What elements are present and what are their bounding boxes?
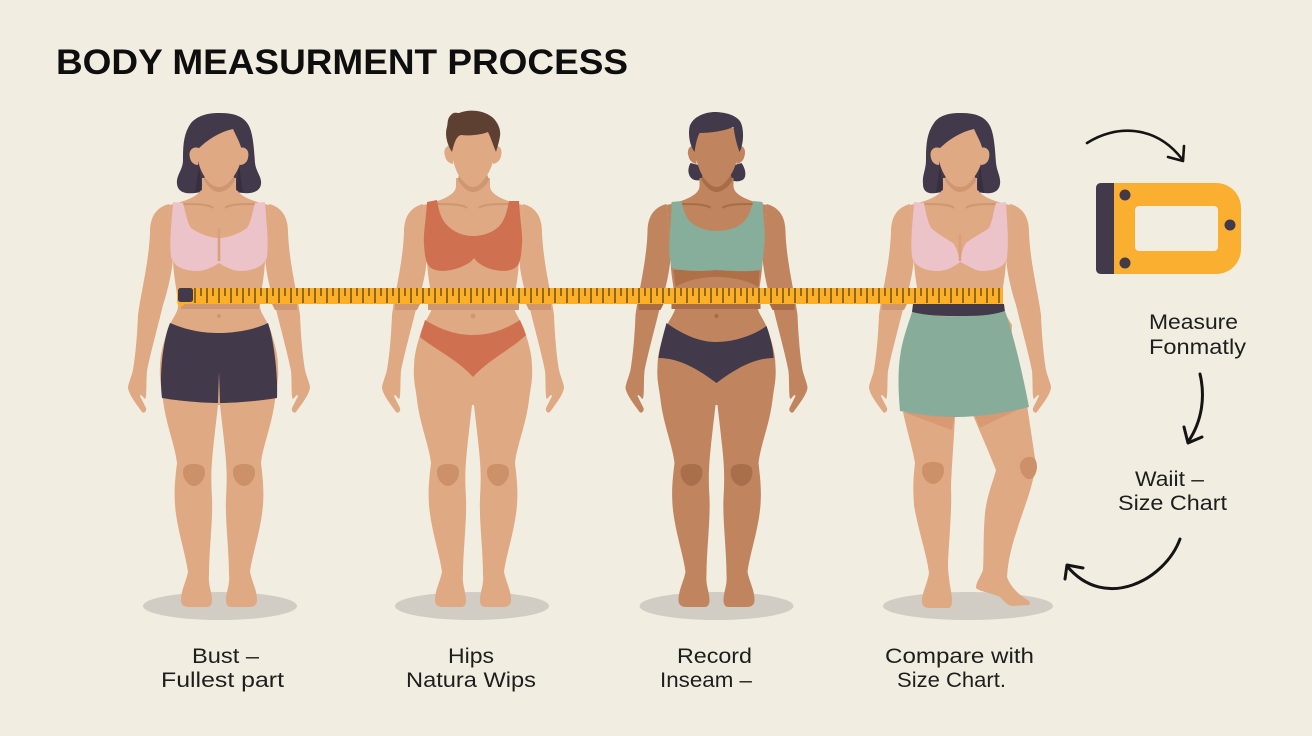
bra centre seam <box>959 234 961 261</box>
label: wait size chart: Size Chart <box>1118 492 1227 515</box>
caption: hips <box>406 645 536 692</box>
thigh shadows under skirt <box>903 405 1027 430</box>
label: wait size chart: Waiit – <box>1135 468 1204 491</box>
face <box>938 129 983 187</box>
tape shadow <box>395 304 551 310</box>
floor shadow <box>395 592 549 620</box>
right leg <box>973 405 1036 606</box>
body <box>626 178 808 607</box>
body <box>128 178 310 607</box>
crop top <box>669 201 765 271</box>
collarbones <box>680 204 752 208</box>
neck shadow <box>204 174 235 192</box>
hair back <box>177 113 261 193</box>
left leg <box>903 412 955 608</box>
tape body <box>177 288 1003 307</box>
figure 2: hips <box>382 111 564 620</box>
rivets <box>1120 190 1130 200</box>
knees <box>183 464 255 486</box>
torso and arms <box>869 178 1051 413</box>
tape end cap <box>178 288 193 302</box>
hair back <box>923 113 1000 193</box>
caption: compare: Size Chart. <box>897 669 1006 692</box>
tape shadow <box>882 304 907 310</box>
figure 4: compare with size chart <box>869 113 1053 620</box>
tied-back hair <box>689 112 743 152</box>
collarbones <box>437 204 509 208</box>
floor shadow <box>883 592 1053 620</box>
belly button <box>217 314 221 318</box>
caption: bust <box>161 645 284 692</box>
bra <box>170 202 268 271</box>
hair shading <box>936 165 984 193</box>
briefs <box>420 320 526 377</box>
bra centre seam <box>218 228 220 261</box>
bra <box>911 202 1008 271</box>
arrow: back <box>1065 539 1180 589</box>
knees <box>437 464 509 486</box>
collarbones <box>924 204 996 208</box>
ears <box>688 146 745 164</box>
shorts <box>161 323 277 403</box>
window <box>1135 206 1218 251</box>
belt <box>912 304 1005 316</box>
arrow: down <box>1184 374 1202 443</box>
arrow: to tool <box>1087 131 1184 161</box>
neck shadow <box>945 174 976 192</box>
hair buns <box>688 163 745 181</box>
face <box>450 130 496 187</box>
tape tool icon <box>1096 183 1241 274</box>
knees <box>680 464 752 486</box>
figure 3: inseam <box>626 112 808 620</box>
skirt <box>898 311 1029 417</box>
caption: inseam <box>660 645 752 692</box>
orange casing <box>1110 183 1241 274</box>
caption: inseam: Record <box>677 645 752 668</box>
caption: hips: Hips <box>448 645 494 668</box>
hair shading <box>195 165 243 193</box>
label: wait size chart <box>1118 468 1227 515</box>
belly button <box>714 314 719 318</box>
floor shadow <box>143 592 297 620</box>
neck shadow <box>702 174 732 192</box>
figure 1: bust <box>128 113 310 620</box>
briefs <box>658 323 774 383</box>
underbust shadow <box>674 270 760 287</box>
caption: hips: Natura Wips <box>406 669 536 692</box>
caption: bust: Bust – <box>192 645 259 668</box>
ears <box>444 146 502 164</box>
label: measure formally: Measure <box>1149 311 1238 334</box>
belly button <box>471 314 475 318</box>
face <box>197 129 242 187</box>
tape shadow <box>638 304 794 310</box>
short hair <box>446 111 500 152</box>
caption: bust: Fullest part <box>161 669 284 692</box>
caption: compare: Compare with <box>885 645 1034 668</box>
ears <box>190 147 248 165</box>
dark end <box>1096 183 1114 274</box>
label: measure formally <box>1149 311 1247 359</box>
body <box>382 178 564 607</box>
neck shadow <box>458 174 489 192</box>
measuring tape <box>177 288 1003 307</box>
tape shadow <box>181 304 297 310</box>
face <box>694 128 739 187</box>
knees <box>922 457 1037 484</box>
caption: compare <box>885 645 1034 692</box>
collarbones <box>183 204 255 208</box>
floor shadow <box>640 592 794 620</box>
ears <box>931 147 989 165</box>
tape ticks <box>194 288 1000 304</box>
top <box>424 200 522 271</box>
label: measure formally: Fonmatly <box>1149 336 1247 359</box>
caption: inseam: Inseam – <box>660 669 752 692</box>
title: BODY MEASURMENT PROCESS <box>56 43 628 82</box>
